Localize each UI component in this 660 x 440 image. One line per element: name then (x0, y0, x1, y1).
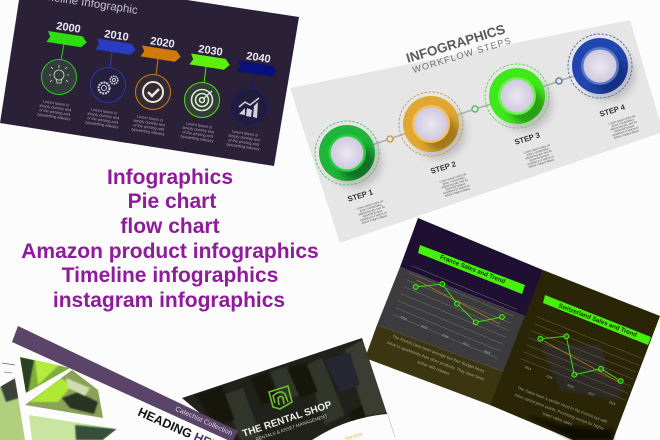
central text list: Infographics (107, 166, 233, 189)
step 4 label: Lorem ipsum dolor sit (608, 114, 636, 126)
step 2030 (180, 43, 231, 143)
step 2020 (131, 35, 182, 136)
step 4 circle (568, 34, 635, 101)
step 3 label: incididunt ut labore et (527, 154, 554, 166)
step 2030: simply dummy text (182, 125, 216, 135)
step 3 label: eiusmod tempor (529, 152, 550, 162)
step 2 label: STEP 2 (430, 160, 457, 176)
step 2 label: Lorem ipsum dolor sit (439, 172, 467, 184)
central text list: instagram infographics (53, 289, 285, 312)
Switzerland chart: 2016 (567, 383, 574, 389)
icon: light bulb (49, 65, 69, 83)
step 2 label: dolore magna aliqua (444, 186, 471, 198)
step 2010: of the printing and (87, 115, 118, 125)
brand name: THE RENTAL SHOP (241, 399, 334, 440)
France chart: move to apartments than other products. They have been (386, 340, 486, 382)
step 2010: Lorem Ipsum is (91, 107, 118, 116)
step 2 label: incididunt ut labore et (443, 183, 470, 195)
step 2030: 2030 (197, 43, 223, 59)
step 2020: Lorem Ipsum is (137, 114, 164, 123)
step 2040: typesetting industry (226, 141, 260, 151)
central text list (21, 166, 319, 312)
step 2000: typesetting industry (37, 111, 71, 121)
step 1 label: Lorem ipsum dolor sit (356, 199, 384, 211)
step 2000: of the printing and (39, 107, 70, 117)
Switzerland chart: The Swiss have a similar trend to the French but with (517, 385, 609, 424)
France chart: 2015 (421, 324, 428, 330)
panel: the rental shop (182, 338, 390, 440)
Switzerland chart: 2015 (546, 374, 553, 380)
central text list: Timeline infographics (62, 264, 278, 287)
France chart: The French have been average but their Budget items (392, 334, 485, 374)
thin page edge (387, 412, 395, 437)
step 2 label: amet, consectetur (442, 175, 465, 186)
connector line (347, 67, 601, 153)
step 2040: 2040 (245, 50, 271, 66)
icon: target (192, 90, 212, 110)
step 2040: simply dummy text (228, 133, 262, 143)
France chart: 2016 (442, 333, 449, 339)
workflow subtitle: WORKFLOW STEPS (411, 35, 513, 75)
step 2030: typesetting industry (180, 133, 214, 143)
step 3 label: adipiscing elit, sed do (525, 148, 553, 161)
step 2030: of the printing and (182, 129, 213, 139)
step 4 label (599, 102, 640, 140)
step 3 label: amet, consectetur (526, 146, 549, 157)
Switzerland chart: 2018 (608, 400, 616, 406)
band label: Catechist Collection (174, 406, 233, 437)
panel: sales and trend charts (365, 218, 660, 440)
step 2040 (226, 50, 278, 151)
step 2 label: adipiscing elit, sed do (441, 177, 469, 190)
step 2010: 2010 (103, 28, 129, 44)
panel: workflow steps (290, 20, 660, 243)
panel: timeline infographic (0, 0, 299, 166)
Switzerland chart: lower value sales (542, 411, 573, 427)
step 3 label: dolore magna aliqua (528, 157, 555, 169)
Switzerland chart: 2014 (524, 365, 532, 371)
France chart: 2018 (483, 349, 491, 355)
France chart: active with rebates (417, 359, 450, 376)
step 2000: Lorem Ipsum is (43, 99, 70, 108)
step 2020: of the printing and (133, 122, 164, 132)
central text list: flow chart (120, 215, 220, 238)
step 3 label: Lorem ipsum dolor sit (523, 143, 551, 155)
icon: check mark (143, 82, 163, 102)
step 2010: simply dummy text (87, 111, 121, 121)
connector node green (472, 106, 478, 112)
step 2 label (430, 160, 471, 198)
step 4 label: incididunt ut labore et (612, 125, 639, 137)
step 1 label: STEP 1 (347, 187, 375, 204)
step 2020: simply dummy text (133, 118, 167, 128)
Switzerland chart: Switzerland Sales and Trend (557, 302, 638, 339)
step 2020: 2020 (149, 35, 175, 51)
step 4 label: STEP 4 (599, 102, 627, 119)
connector node blue (556, 78, 562, 84)
step 1 label: incididunt ut labore et (360, 210, 387, 222)
France chart (386, 245, 525, 382)
icon: growth chart (239, 98, 259, 118)
step 2030: Lorem Ipsum is (186, 121, 213, 130)
France chart: France Sales and Trend (439, 254, 506, 285)
step 2020: typesetting industry (131, 126, 165, 136)
step 2000: 2000 (55, 20, 81, 36)
step 2010 (85, 28, 137, 129)
step 2040: of the printing and (228, 137, 259, 147)
step 1 label (347, 187, 388, 225)
step 2000 (37, 20, 88, 121)
step 1 label: amet, consectetur (359, 202, 382, 213)
Switzerland chart: 2017 (588, 391, 595, 397)
panel: catechist collection brochure (0, 326, 395, 440)
central text list: Pie chart (128, 190, 216, 213)
photo collage (0, 357, 117, 440)
step 1 circle (315, 121, 382, 188)
step 1 label: eiusmod tempor (362, 208, 383, 218)
step 2 circle (399, 92, 466, 159)
Switzerland chart (514, 295, 651, 431)
workflow title: INFOGRAPHICS (404, 21, 507, 66)
icon: gears (98, 76, 118, 94)
purple band (12, 326, 238, 440)
step 4 label: dolore magna aliqua (613, 128, 640, 140)
connector node orange (387, 136, 393, 142)
central text list: Amazon product infographics (21, 240, 319, 263)
France chart: 2017 (462, 341, 470, 347)
Switzerland chart: more varied price points. Promising except for higher (514, 392, 606, 431)
step 4 label: amet, consectetur (611, 117, 634, 128)
logo: shield (269, 386, 292, 409)
step 1 label: adipiscing elit, sed do (358, 204, 386, 217)
step 2 label: eiusmod tempor (445, 181, 466, 191)
step 3 label (514, 131, 555, 169)
step 1 label: dolore magna aliqua (361, 213, 388, 225)
step 2010: typesetting industry (85, 119, 119, 129)
step 2040: Lorem Ipsum is (232, 129, 259, 138)
step 2000: simply dummy text (39, 103, 73, 113)
step 3 circle (485, 64, 552, 131)
France chart: 2014 (400, 315, 408, 321)
step 3 label: STEP 3 (514, 131, 541, 147)
step 4 label: eiusmod tempor (614, 123, 635, 133)
step 4 label: adipiscing elit, sed do (610, 119, 638, 132)
